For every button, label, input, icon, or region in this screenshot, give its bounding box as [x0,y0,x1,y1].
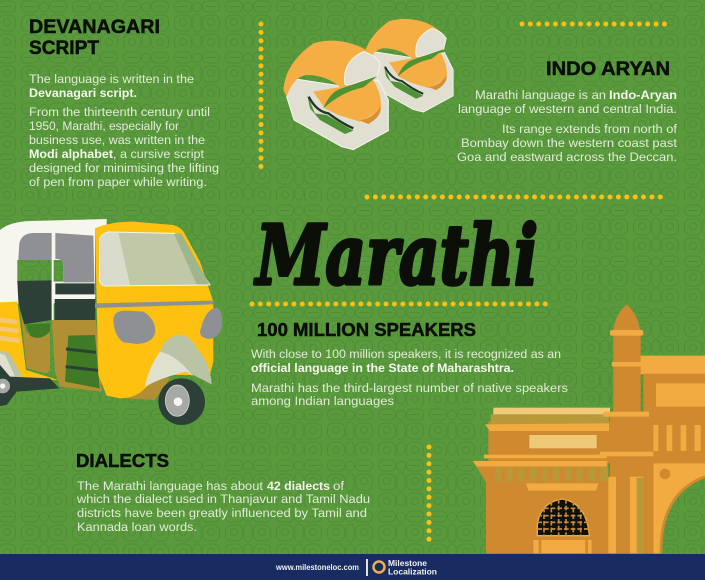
heading: Indo Aryan: INDO ARYAN [546,59,670,80]
text block: speakers: Marathi has the third-largest number of native speakers [251,381,568,395]
text block: dialects: Kannada loan words. [77,520,197,534]
illustration: Gateway of India [473,304,705,553]
heading: Devanagari script [29,17,160,59]
text block: Indo Aryan: Goa and eastward across the Deccan. [457,150,677,164]
text block: Devanagari script: The language is written in the [29,72,194,86]
illustration: auto rickshaw [0,219,222,425]
heading: Devanagari script: SCRIPT [29,38,99,59]
text block: Indo Aryan: Indo-Aryan [609,88,677,102]
footer bar [0,554,705,580]
text block: speakers: official language in the State of Maharashtra. [251,361,514,375]
heading: Devanagari script: DEVANAGARI [29,17,160,38]
footer url: www.milestoneloc.com [275,563,359,572]
footer logo text: Localization [388,566,437,576]
text block: Devanagari script: business use, was written in the [29,133,205,147]
text block: Indo Aryan: Marathi language is an [475,88,606,102]
text block: dialects: districts have been greatly influenced by Tamil and [77,506,367,520]
text block: speakers [251,347,568,408]
text block: Devanagari script: of pen from paper while writing. [29,175,207,189]
footer logo text [388,558,437,576]
text block: dialects: of [333,479,345,493]
text block: dialects [76,479,370,534]
text block: Devanagari script: , a cursive script [113,147,205,161]
heading: 100 million speakers: 100 MILLION SPEAKERS [257,320,476,340]
text block: Devanagari script: From the thirteenth century until [29,105,210,119]
footer logo text: Milestone [388,558,427,568]
text block: Indo Aryan: language of western and central India. [458,102,677,116]
text block: Indo Aryan [457,88,678,164]
text block: Devanagari script [29,72,219,189]
title: Marathi [254,208,538,304]
text block: Devanagari script: Devanagari script. [29,86,137,100]
text block: dialects: The Marathi language has about [77,479,264,493]
text block: speakers: With close to 100 million speakers, it is recognized as an [251,347,561,361]
text block: speakers: among Indian languages [251,394,394,408]
illustration: vada pav [283,19,453,150]
icon: Milestone logo ring [374,562,384,572]
text block: dialects: which the dialect used in Thanjavur and Tamil Nadu [76,492,370,506]
text block: Devanagari script: Modi alphabet [29,147,113,161]
text block: Devanagari script: designed for minimising the lifting [29,161,219,175]
heading: dialects: DIALECTS [76,451,169,471]
text block: Indo Aryan: Its range extends from north of [502,122,678,136]
text block: dialects: 42 dialects [267,479,330,493]
text block: Indo Aryan: Bombay down the western coast past [461,136,678,150]
text block: Devanagari script: 1950, Marathi, especially for [29,119,179,133]
